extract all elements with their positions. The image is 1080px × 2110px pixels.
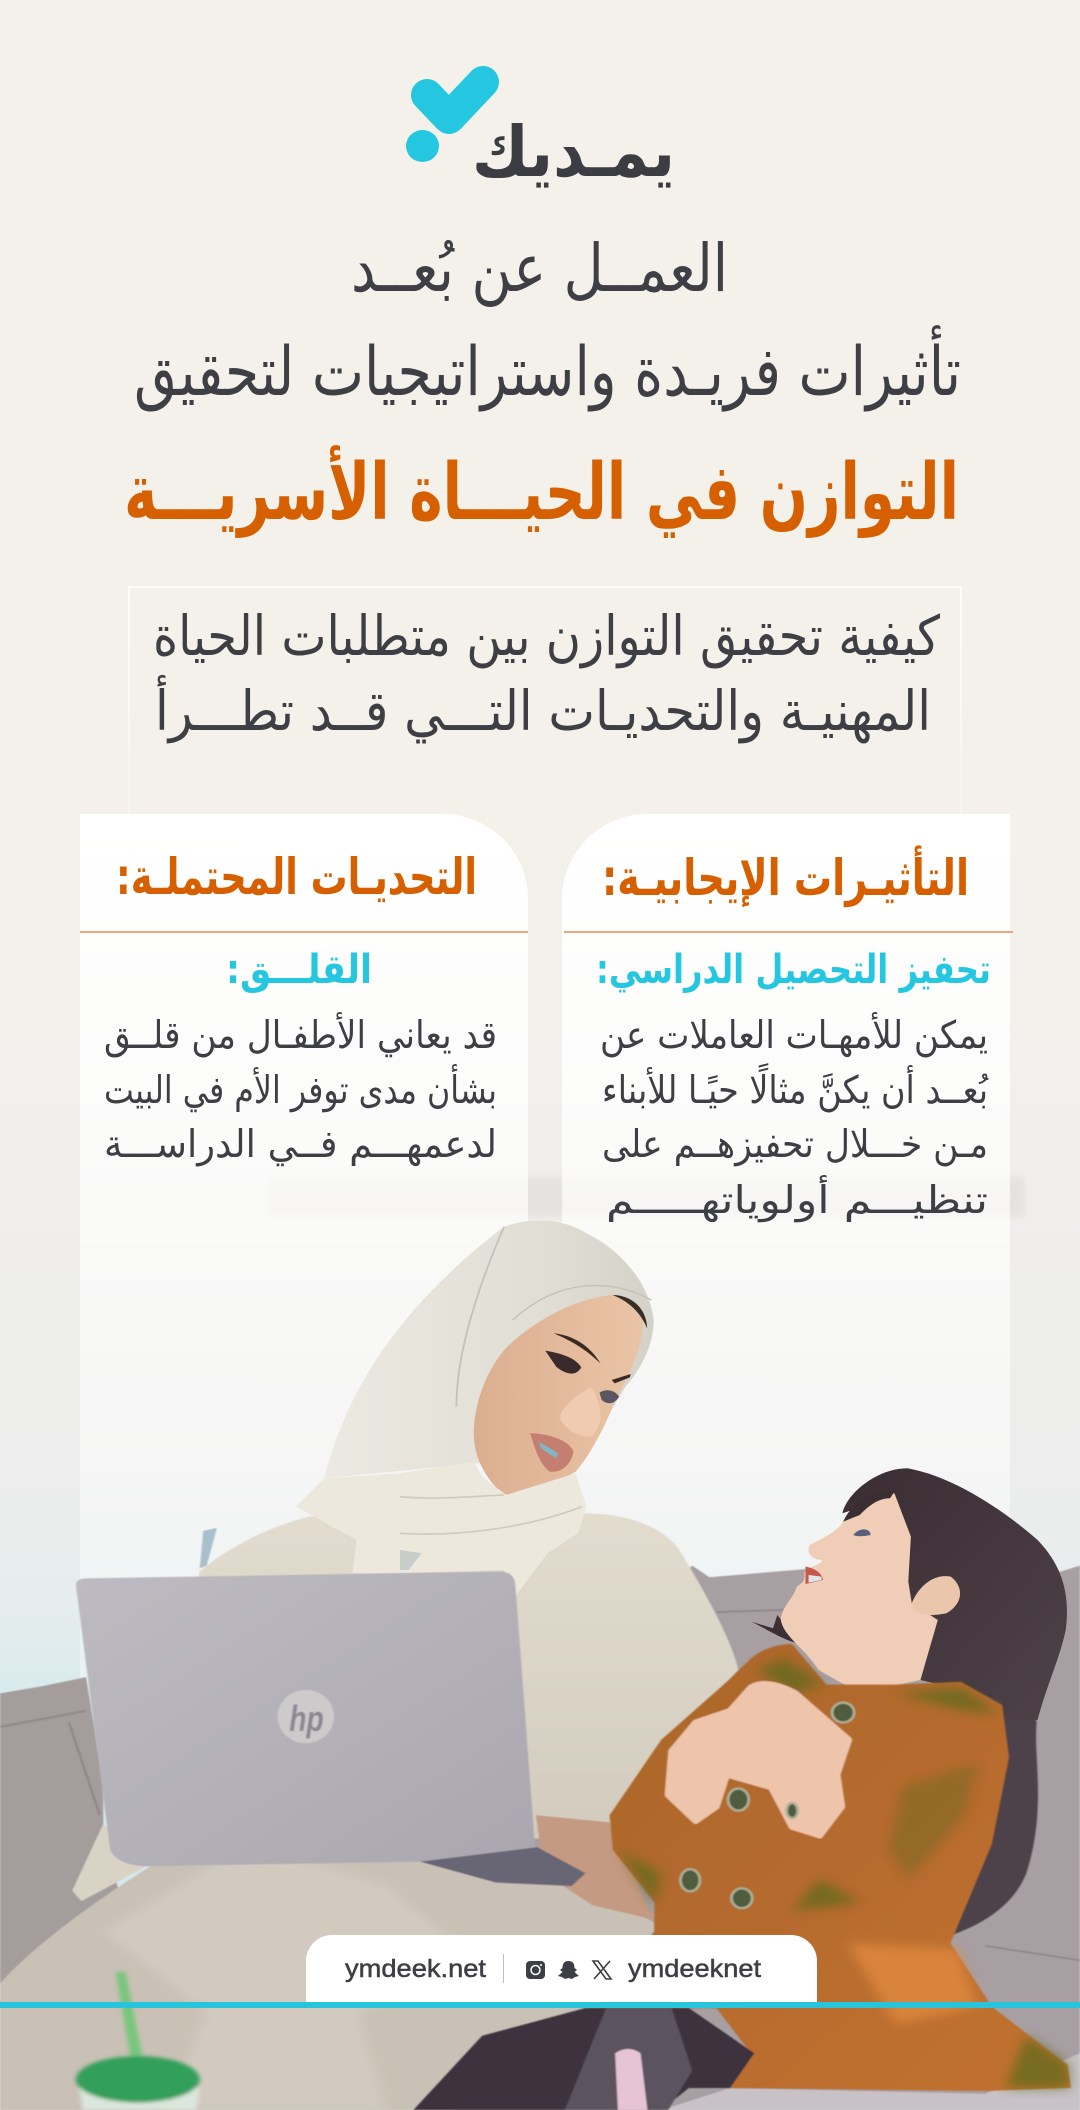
logo mark: dot [406, 130, 439, 162]
sofa left arm [0, 1677, 138, 2013]
icon: X [593, 1961, 611, 1979]
panel heading: التحديـات المحتملـة: [116, 848, 477, 906]
body text [104, 1011, 497, 1167]
child's hands [668, 1684, 849, 1836]
logo [406, 82, 675, 193]
child's head [751, 1468, 1067, 1720]
child's coat and legs [76, 1644, 1071, 2110]
sofa seam right [716, 1609, 1080, 1960]
coat shadows [620, 1659, 1069, 2088]
panel background [80, 814, 528, 1720]
scarf folds [400, 1495, 582, 1534]
sofa right [413, 1566, 1080, 2110]
panel heading: التأثيـرات الإيجابيـة: [602, 845, 969, 908]
teeth [539, 1442, 558, 1458]
logo mark: check [427, 82, 483, 118]
laptop logo [278, 1690, 334, 1743]
sofa seat right [661, 2053, 1080, 2110]
child's right leg [565, 2008, 692, 2110]
pillow edge [200, 1528, 217, 1569]
nose [560, 1387, 601, 1437]
woman's dress [138, 1513, 738, 1850]
fabric left of laptop [72, 1824, 145, 1901]
sofa seam left [0, 1711, 100, 1815]
mouth [806, 1567, 823, 1584]
hair [842, 1468, 1067, 1720]
subtitle text [153, 604, 941, 744]
eyebrows [554, 1333, 631, 1383]
subtitle frame [129, 587, 961, 932]
child's left leg [413, 2008, 754, 2110]
subtitle line 2: المهنيـة والتحديـات التـــي قــد تطـــرأ [155, 675, 931, 744]
laptop and woman's hand [76, 1528, 1050, 1934]
scarf shadow [400, 1550, 422, 1570]
woman's hand [536, 1815, 654, 1920]
body text: يمكن للأمهـات العاملات عن [600, 1011, 988, 1058]
hijab [324, 1221, 654, 1478]
coat highlight [847, 1943, 978, 2024]
child's teeth [809, 1575, 822, 1583]
panel rule [564, 931, 1013, 933]
hijab fold [456, 1227, 652, 1407]
sofa and woman's body [0, 1513, 1080, 2110]
panel: challenges [80, 814, 528, 1720]
green cup [76, 1972, 200, 2110]
lips [530, 1433, 573, 1472]
subheading: تحفيز التحصيل الدراسي: [596, 947, 991, 993]
social handle: ymdeeknet [628, 1955, 761, 1983]
panel rule [80, 931, 528, 933]
coat [589, 1644, 1071, 2091]
fringe [843, 1491, 894, 1522]
panel background [562, 814, 1010, 1720]
footer contact bar [306, 1935, 817, 2002]
body text: قد يعاني الأطفـال من قلــق [104, 1011, 497, 1058]
body text: تنظيـــم أولوياتهـــــم [606, 1175, 988, 1223]
pink straw [615, 2049, 647, 2110]
website: ymdeek.net [345, 1955, 486, 1983]
title [134, 230, 961, 412]
title line 1: العمــل عن بُعــد [351, 230, 728, 307]
body text [600, 1011, 988, 1223]
icon: instagram [526, 1961, 545, 1979]
panel: positive effects [562, 814, 1013, 1720]
hair under hijab [613, 1295, 647, 1328]
footer background [306, 1935, 817, 2002]
subheading: القلـــق: [226, 947, 372, 993]
face [781, 1493, 938, 1693]
trousers highlight [103, 1844, 468, 2110]
divider [503, 1954, 504, 1983]
back hair wisp [751, 1615, 803, 1645]
ear [912, 1576, 960, 1615]
woman's head and scarf [296, 1221, 654, 1597]
woman's trousers [0, 1815, 654, 2110]
scarf [296, 1462, 586, 1597]
faint shadow band behind panels [268, 1177, 1025, 1217]
face [474, 1295, 643, 1495]
photo: mother and child on sofa [0, 1221, 1080, 2110]
coat buttons [681, 1703, 854, 1908]
child's hair lower [923, 1659, 1050, 1934]
eye [853, 1529, 871, 1536]
eyes [545, 1351, 581, 1374]
subtitle line 1: كيفية تحقيق التوازن بين متطلبات الحياة [153, 604, 941, 669]
laptop base [420, 1847, 585, 1886]
body text: بشأن مدى توفر الأم في البيت [104, 1064, 497, 1113]
laptop lid [76, 1571, 536, 1866]
laptop logo: hp [289, 1699, 324, 1739]
body text: بُعــد أن يكنَّ مثالًا حيًـا للأبناء [602, 1063, 988, 1113]
cyan bottom rule [0, 2002, 1080, 2008]
body text: مـن خـــلال تحفيزهــم على [602, 1122, 988, 1167]
logo wordmark: يمـديك [472, 111, 675, 193]
icon: snapchat [558, 1961, 579, 1979]
body text: لدعمهـــم فــي الدراســـة [104, 1122, 497, 1167]
